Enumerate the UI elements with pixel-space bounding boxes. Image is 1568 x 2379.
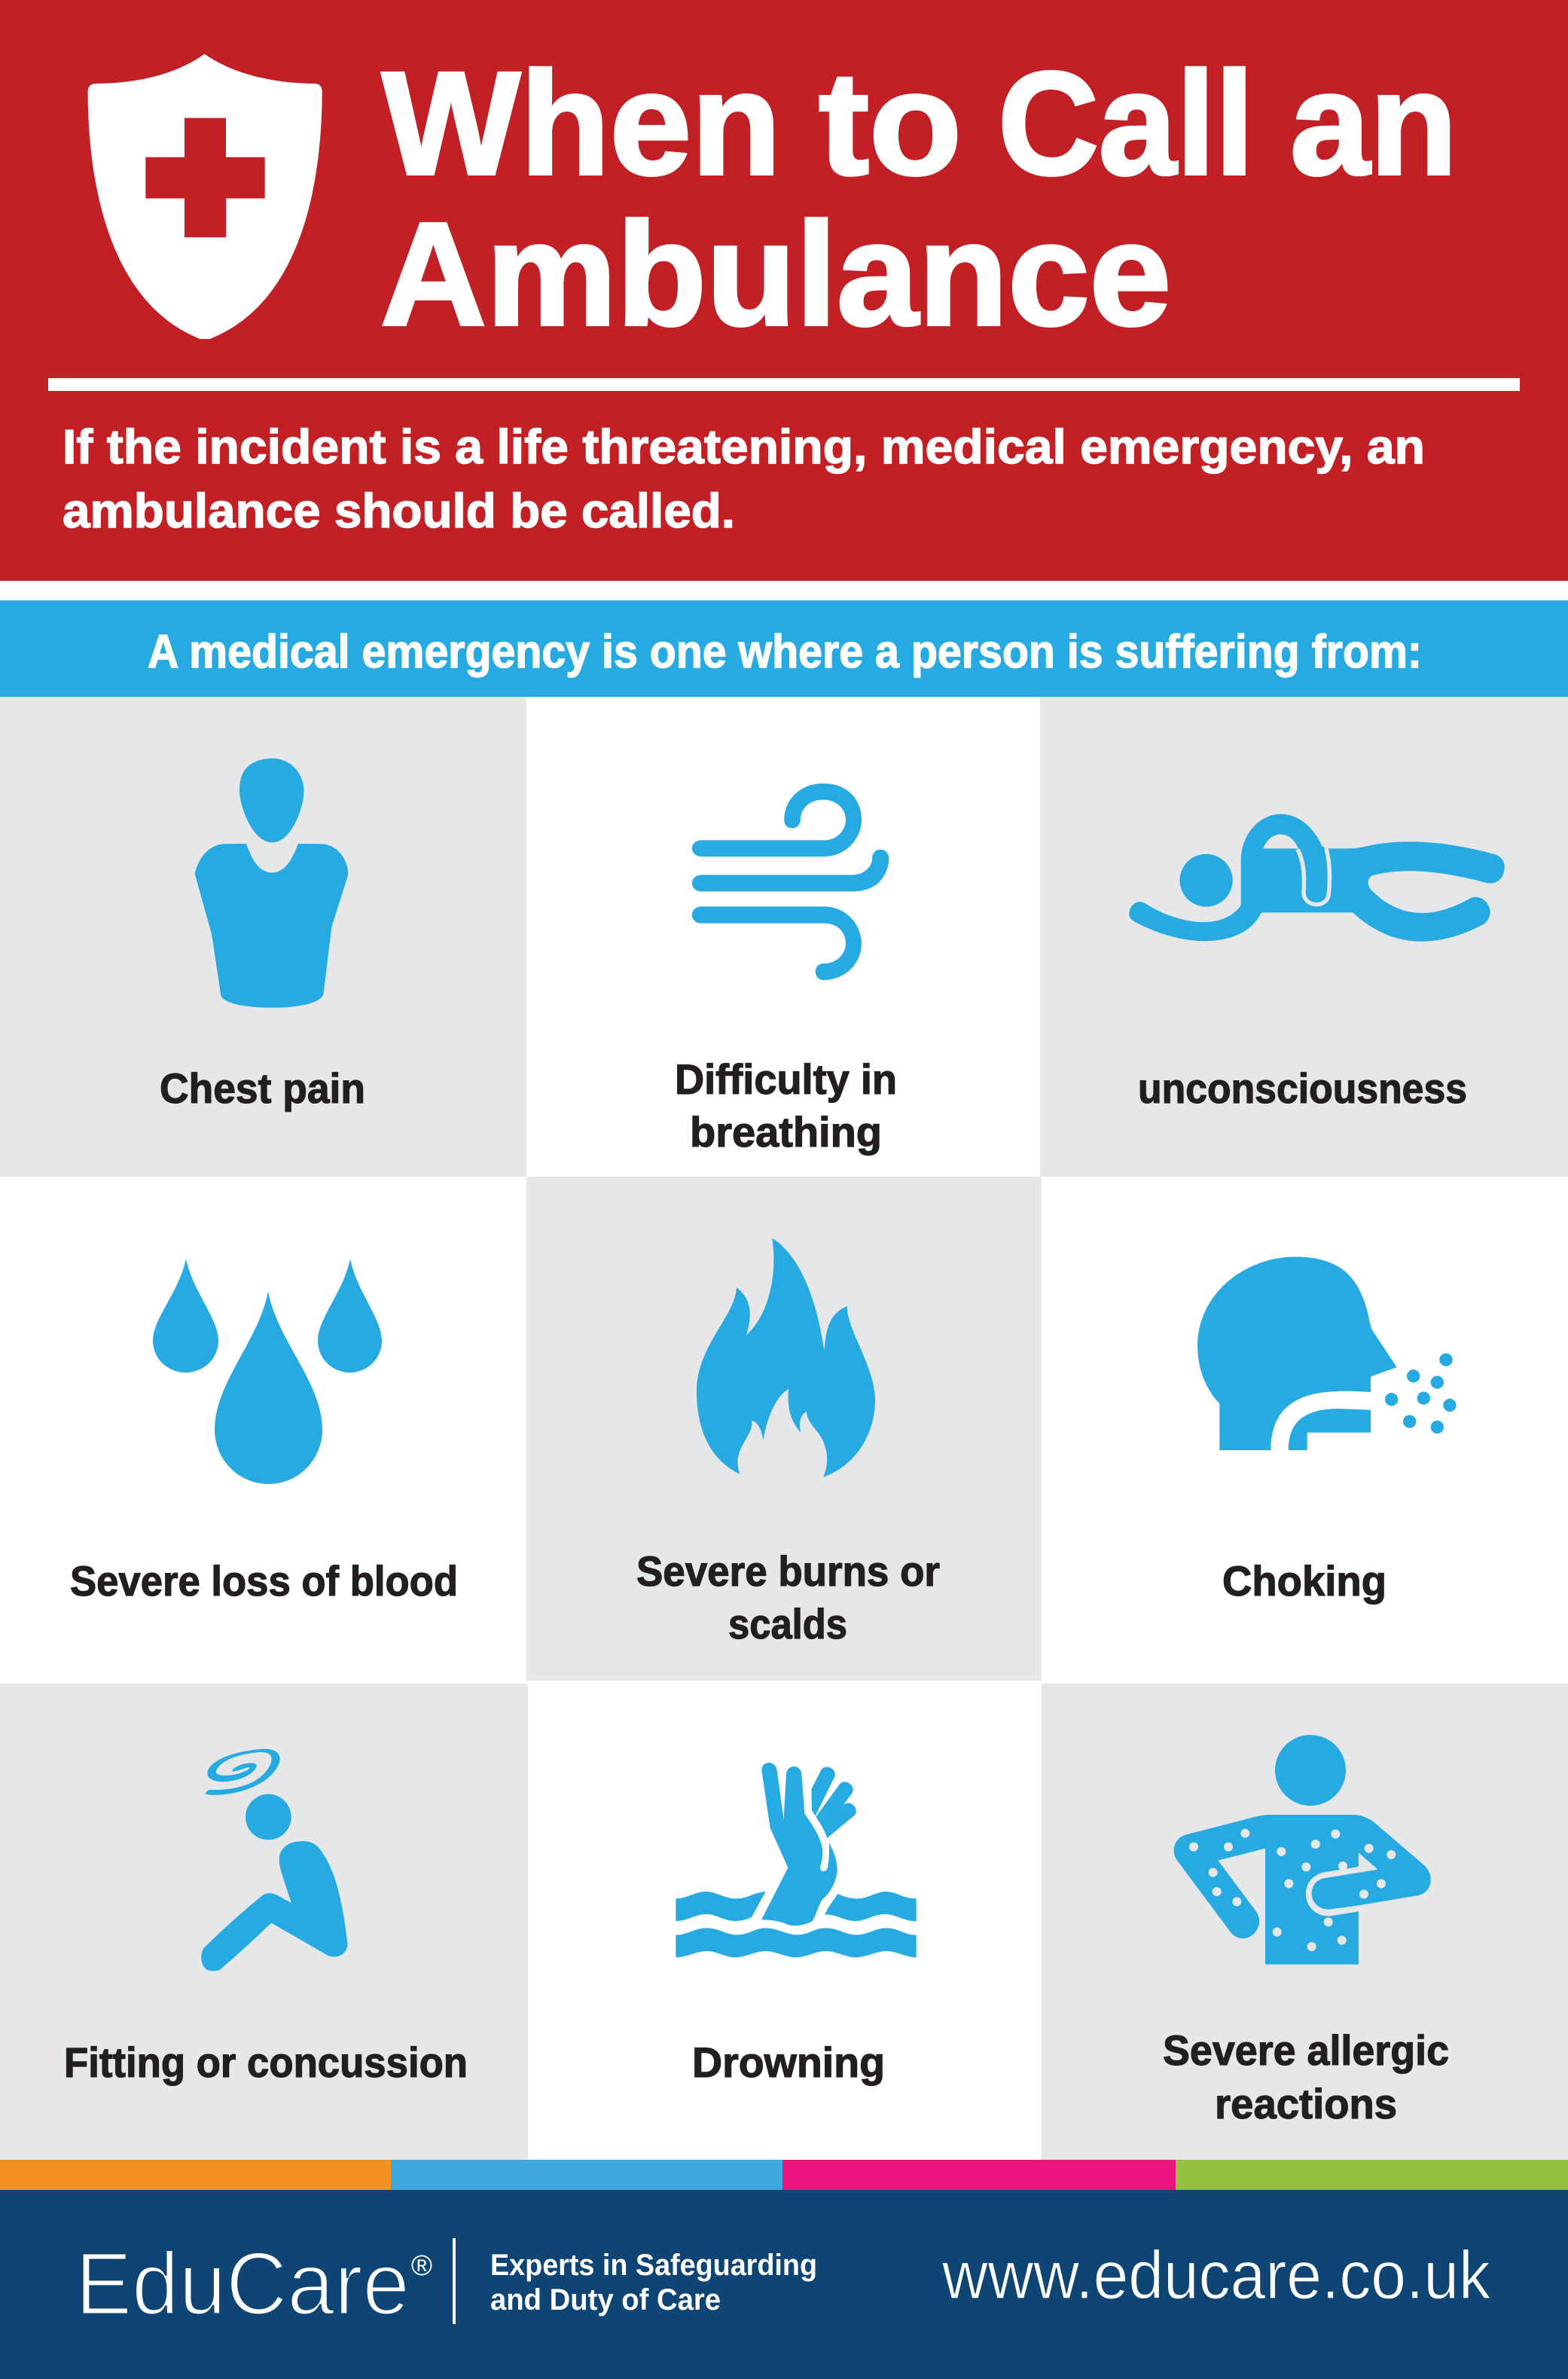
icon: choking head: [1197, 1257, 1457, 1450]
panel: severe loss of blood: [0, 1177, 526, 1684]
label: [675, 1055, 897, 1156]
label: Fitting or concussion: [64, 2038, 468, 2086]
icon: shield with cross: [88, 54, 322, 339]
panel: severe burns or scalds: [526, 1177, 1042, 1681]
logo: EduCare: ®: [411, 2250, 432, 2282]
panel: fitting or concussion: [0, 1684, 528, 2160]
tagline: and Duty of Care: [490, 2283, 721, 2316]
panel: blue banner: [0, 600, 1568, 697]
label: Chest pain: [160, 1064, 365, 1112]
label: breathing: [690, 1108, 882, 1156]
icon: wind: [692, 783, 889, 980]
title: Ambulance: [380, 192, 1171, 356]
label: reactions: [1215, 2080, 1397, 2127]
icon: blood drops: [153, 1259, 382, 1484]
intro text: ambulance should be called.: [63, 484, 735, 538]
panel: difficulty in breathing: [526, 697, 1040, 1177]
panel: footer: [0, 2190, 1568, 2379]
website url: www.educare.co.uk: [941, 2238, 1491, 2313]
tagline: Experts in Safeguarding: [490, 2249, 817, 2282]
title: Call: [998, 41, 1254, 206]
icon: chest pain: [195, 759, 348, 1008]
icon: person with rash: [1174, 1735, 1431, 1965]
label: [1163, 2026, 1449, 2127]
intro text: [63, 420, 1425, 538]
panel: red header: [0, 0, 1568, 581]
label: Difficulty in: [675, 1055, 897, 1103]
colour strip: [0, 2160, 1568, 2190]
icon: drowning hand: [676, 1763, 917, 1957]
panel: choking: [1042, 1177, 1568, 1684]
label: Drowning: [692, 2038, 885, 2086]
label: Severe burns or: [636, 1547, 940, 1595]
label: Severe loss of blood: [70, 1557, 458, 1605]
panel: drowning: [528, 1681, 1042, 2160]
tagline: [490, 2249, 817, 2316]
label: Severe allergic: [1163, 2026, 1449, 2074]
panel: unconsciousness: [1040, 697, 1568, 1177]
icon: unconscious person: [1129, 814, 1505, 942]
label: Choking: [1222, 1557, 1386, 1605]
label: scalds: [728, 1600, 847, 1648]
panel: chest pain: [0, 697, 526, 1177]
icon: fitting person: [201, 1749, 348, 1971]
icon: flame: [697, 1238, 875, 1477]
panel: severe allergic reactions: [1042, 1684, 1568, 2160]
title: [380, 41, 1457, 356]
label: [636, 1547, 940, 1648]
panel: blue banner: A medical emergency is one where a person is suffering from:: [148, 626, 1422, 678]
title: When: [382, 41, 781, 206]
title: to: [819, 41, 962, 206]
intro text: If the incident is a life threatening, medical emergency, an: [63, 420, 1425, 474]
logo: EduCare: EduCare: [75, 2234, 410, 2334]
label: unconsciousness: [1138, 1064, 1467, 1112]
title: an: [1290, 41, 1457, 206]
